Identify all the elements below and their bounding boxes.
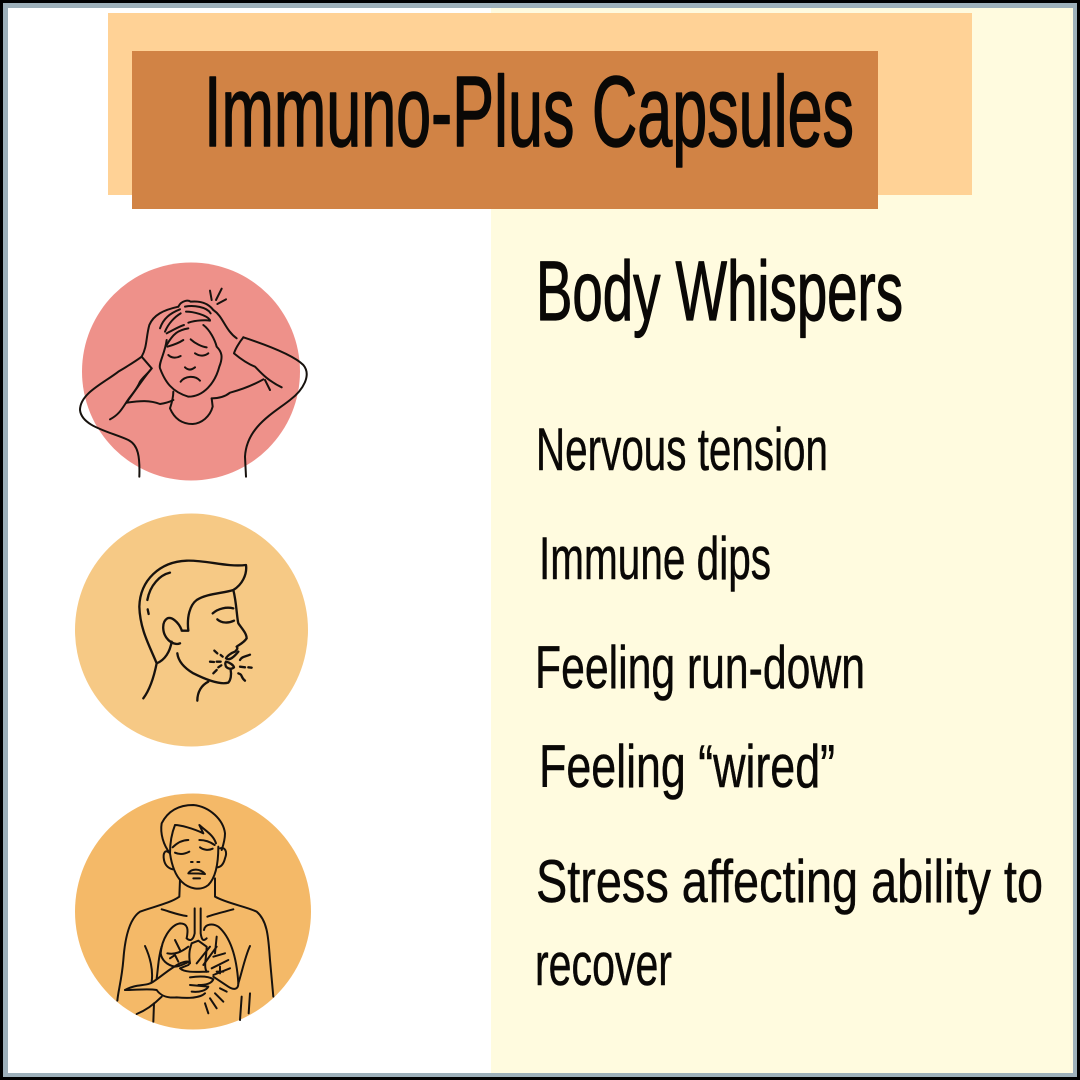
list item: Immune dips: Immune dips: [539, 525, 771, 592]
list item: Feeling wired: Feeling “wired”: [539, 733, 835, 800]
icon: man holding chest with lungs: [75, 794, 311, 1030]
icon: person with headache: [80, 262, 307, 480]
header band: peach backing: [108, 13, 972, 195]
panel: right cream background: [491, 8, 1073, 1073]
list item: Nervous tension: Nervous tension: [536, 416, 828, 483]
icon: man coughing in profile: [75, 514, 308, 746]
list item: Feeling run-down: Feeling run-down: [535, 634, 865, 701]
list item: recover: recover: [535, 931, 672, 998]
header band: orange title plate: [132, 51, 878, 209]
